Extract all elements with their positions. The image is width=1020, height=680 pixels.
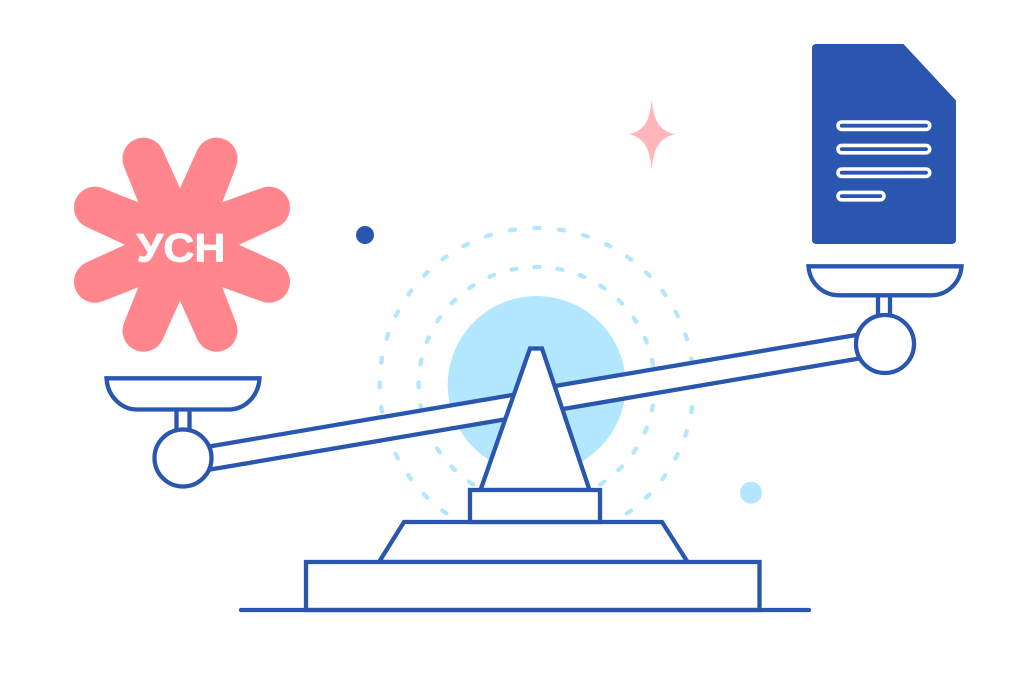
dot: navy xyxy=(356,226,374,244)
background glow with dashed rings xyxy=(380,228,694,542)
beam edges xyxy=(205,334,865,470)
left pan xyxy=(106,378,260,486)
right pan xyxy=(808,266,962,373)
fulcrum stand xyxy=(306,348,760,610)
icon: USN asterisk badge xyxy=(74,138,290,352)
badge label: УСН xyxy=(136,227,226,271)
icon: document xyxy=(812,44,956,244)
scale beam xyxy=(200,334,874,471)
dot: light blue xyxy=(740,482,762,504)
icon: sparkle xyxy=(629,99,675,170)
ground line xyxy=(241,608,809,612)
